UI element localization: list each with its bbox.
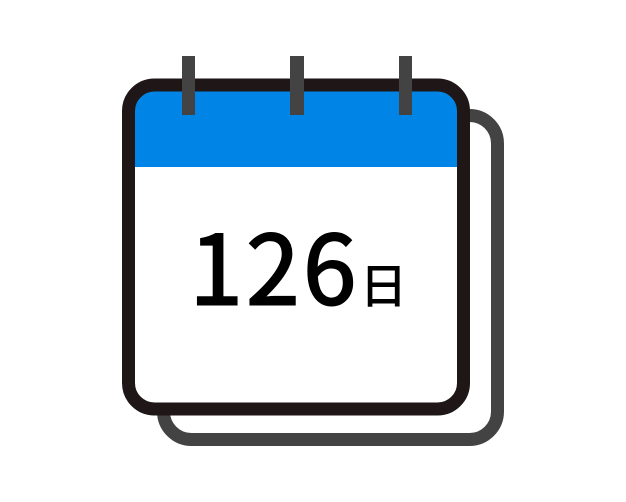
binder ring left — [182, 56, 195, 115]
binder ring middle — [290, 56, 304, 115]
day count label — [190, 194, 407, 332]
blue calendar header — [128, 85, 464, 167]
front calendar page — [128, 85, 464, 409]
day count number: 126 — [190, 194, 360, 332]
binder ring right — [399, 56, 412, 115]
day unit: 日 — [360, 248, 407, 317]
back calendar page — [164, 116, 498, 440]
